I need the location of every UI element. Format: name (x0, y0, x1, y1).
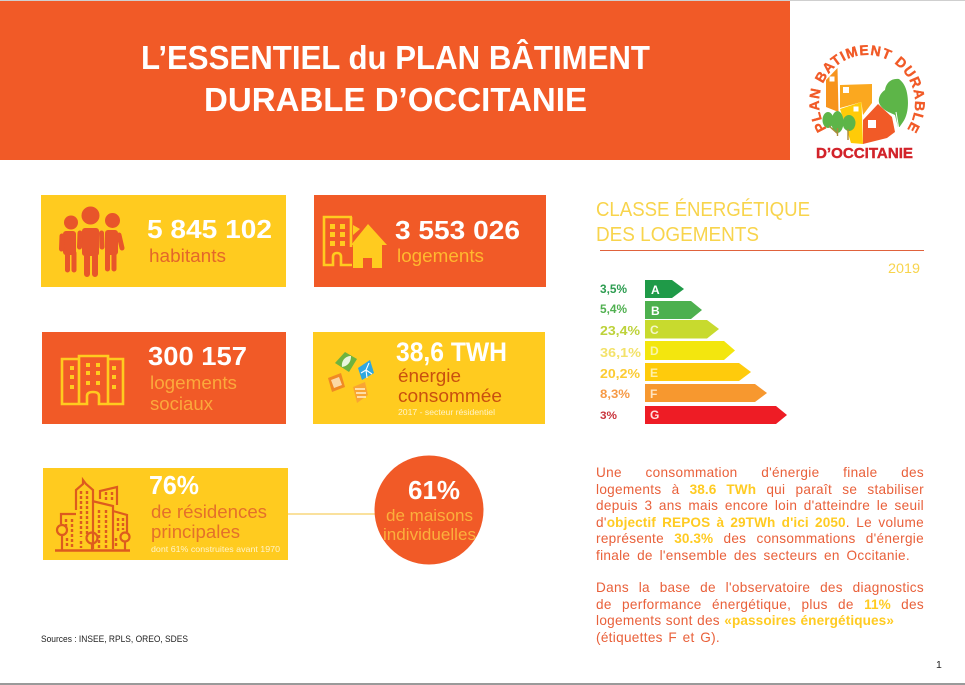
bar C (600, 320, 719, 338)
panel: logements sociaux (42, 332, 286, 424)
heading: classe énergétique: DES LOGEMENTS (596, 224, 759, 246)
figure: energy consumed: 38,6 TWH (396, 337, 507, 367)
bar G (600, 406, 787, 424)
text block: analysis: représente 30.3% des consommations d'énergie (596, 531, 924, 546)
bar B: B (651, 304, 660, 318)
bar E (600, 363, 751, 381)
text block: analysis: de performance énergétique, plus de 11% des (596, 596, 924, 612)
text block: analysis (596, 465, 924, 645)
text block: analysis: d'objectif REPOS à 29TWh d'ici 2050. Le volume (596, 514, 924, 530)
bar F: 8,3% (600, 387, 630, 401)
text block: analysis: Dans la base de l'observatoire des diagnostics (596, 580, 924, 595)
label: logements: logements (397, 246, 484, 266)
header banner with title (0, 1, 790, 160)
label: logements sociaux: logements (150, 373, 237, 393)
bar F (600, 384, 767, 402)
figure: 76%: 76% (149, 470, 199, 500)
circle: maisons individuelles: de maisons (386, 506, 473, 525)
bar A (600, 280, 684, 298)
label: énergie consommée: énergie (398, 366, 461, 386)
text block: analysis: (étiquettes F et G). (596, 630, 720, 644)
label: énergie consommée (398, 366, 502, 406)
header banner with title: DURABLE D’OCCITANIE (204, 81, 587, 118)
icon: building and house (324, 217, 387, 268)
circle: maisons individuelles (374, 456, 484, 564)
heading: classe énergétique (596, 198, 810, 246)
chart: energy class arrows (600, 280, 787, 424)
icon: energy tiles (328, 352, 374, 403)
bar D: D (650, 344, 659, 358)
text block: analysis: depuis 3 ans mais encore loin d'atteindre le seuil (596, 498, 924, 513)
text block: analysis: logements sont des «passoires énergétiques» (596, 613, 894, 628)
page number: 1 (936, 659, 942, 671)
bar B: 5,4% (600, 304, 627, 316)
bar C: C (650, 323, 659, 337)
bar G: G (650, 408, 659, 422)
heading: classe énergétique: CLASSE ÉNERGÉTIQUE (596, 198, 810, 221)
figure: population: 5 845 102 (147, 214, 272, 244)
circle: maisons individuelles: 61% (408, 475, 460, 505)
text block: analysis: Une consommation d'énergie finale des (596, 465, 924, 480)
figure: dwellings: 3 553 026 (395, 215, 520, 245)
circle: maisons individuelles: individuelles (383, 525, 476, 544)
year label: 2019 (888, 261, 920, 276)
text block: analysis: finale de l'ensemble des secteurs en Occitanie. (596, 548, 910, 562)
bar E: E (650, 366, 658, 380)
bar C: 23,4% (600, 323, 640, 338)
bar B (600, 301, 702, 319)
label: énergie consommée: consommée (398, 386, 502, 406)
bar A: A (651, 283, 660, 297)
icon: apartment blocks (62, 356, 123, 404)
sources: Sources : INSEE, RPLS, OREO, SDES (41, 634, 188, 644)
label: de résidences principales (151, 502, 267, 542)
label: de résidences principales: de résidences (151, 502, 267, 522)
bar F: F (650, 387, 657, 401)
icon: people (62, 206, 122, 274)
label: logements sociaux: sociaux (150, 394, 213, 414)
bar A: 3,5% (600, 284, 627, 296)
header banner with title: L’ESSENTIEL du PLAN BÂTIMENT (141, 39, 650, 76)
text block: analysis: logements à 38.6 TWh qui paraît se stabiliser (596, 482, 924, 496)
note: 2017 secteur résidentiel: 2017 - secteur résidentiel (398, 408, 495, 417)
icon: city skyline with trees (55, 480, 130, 550)
label: habitants: habitants (149, 246, 226, 266)
figure: social housing: 300 157 (148, 341, 247, 371)
bar G: 3% (600, 410, 617, 422)
panel: habitants (41, 195, 286, 287)
logo: Plan Bâtiment Durable d'Occitanie: D’OCCITANIE (816, 145, 913, 162)
bar E: 20,2% (600, 366, 640, 381)
bar D: 36,1% (600, 345, 641, 360)
bar D (600, 341, 735, 360)
panel: logements (314, 195, 546, 287)
label: logements sociaux (150, 373, 237, 414)
panel: énergie consommée (313, 332, 545, 424)
label: de résidences principales: principales (151, 522, 240, 542)
note: dont 61% construites avant 1970: dont 61% construites avant 1970 (151, 544, 280, 554)
panel: résidences principales (43, 468, 288, 560)
logo: Plan Bâtiment Durable d'Occitanie: PLAN BATIMENT DURABLE (809, 45, 925, 134)
connector line (288, 514, 376, 515)
